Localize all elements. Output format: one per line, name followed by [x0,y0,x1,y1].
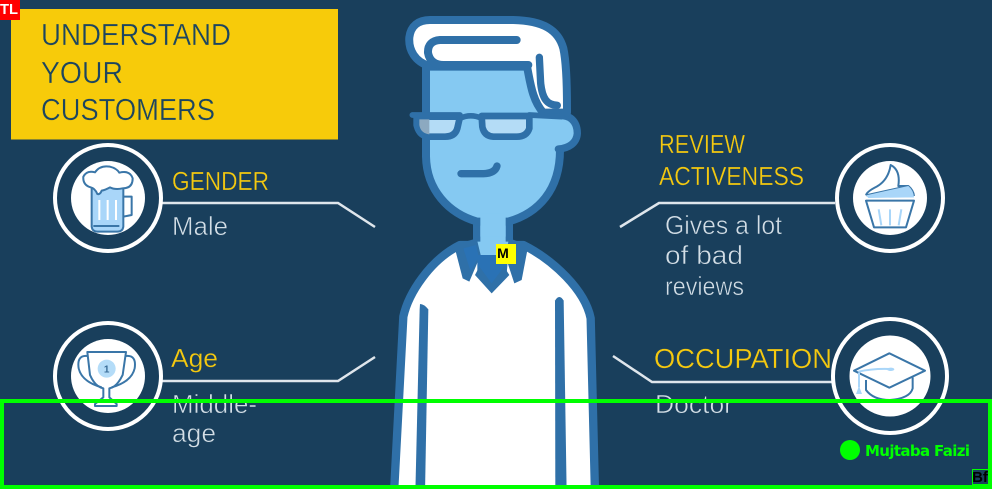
glasses [412,115,562,137]
neck [477,217,508,255]
collar [454,238,528,293]
label: OCCUPATION [654,343,832,374]
green annotation frame [2,401,990,487]
label: REVIEW [659,129,745,159]
icon: trophy: 1 [104,364,110,375]
value: Doctor [655,389,733,419]
age block: age [172,418,216,448]
title panel [11,9,338,140]
review activeness block: of bad [665,240,743,270]
badge: Bf: Bf [972,469,989,486]
badge: TL: TL [0,1,18,18]
icon: graduation cap [833,319,947,433]
badge: M [496,244,516,264]
icon: cupcake [837,145,943,251]
character illustration: body [394,245,595,489]
hair [409,20,567,113]
mouth [461,166,497,174]
gender block [55,145,269,251]
label: Age [171,343,218,373]
character illustration: head [409,20,577,293]
watermark: Mujtaba Faizi: Mujtaba Faizi [865,442,970,460]
ear [555,115,577,149]
title panel: CUSTOMERS [41,92,215,127]
age block [55,323,257,448]
review activeness block: reviews [665,271,744,301]
label: GENDER [172,166,269,196]
title panel: UNDERSTAND [41,17,231,52]
title panel: YOUR [41,55,123,90]
connector lines [162,203,845,382]
face [426,67,560,222]
review activeness block [659,129,943,301]
review activeness block: ACTIVENESS [659,161,804,191]
icon: trophy [55,323,161,429]
value: Gives a lot [665,210,783,240]
occupation block [654,319,947,433]
badge: M: M [497,245,509,261]
value: Male [172,211,228,241]
value: Middle- [172,389,257,419]
icon: beer mug [55,145,161,251]
